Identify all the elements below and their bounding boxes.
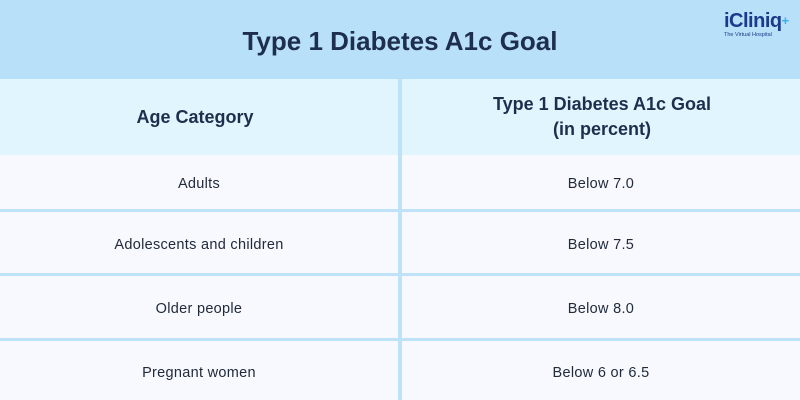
row: older: [156, 301, 634, 317]
row: pregnant: [142, 364, 649, 380]
header band: [0, 0, 800, 79]
header: age category: Age Category: [136, 106, 254, 126]
row: adolescents: Adolescents and children: [114, 236, 284, 252]
header: goal: Type 1 Diabetes A1c Goal: [493, 94, 711, 114]
row: adolescents: Below 7.5: [568, 236, 634, 252]
row: older: Older people: [156, 301, 242, 317]
row: adults: Below 7.0: [568, 176, 634, 192]
row: adolescents: [114, 236, 634, 252]
header: goal: (in percent): [553, 119, 651, 139]
header: goal: [493, 94, 711, 139]
row: pregnant: Below 6 or 6.5: [553, 364, 649, 380]
row: adults: [178, 176, 634, 192]
title: Type 1 Diabetes A1c Goal: [242, 26, 558, 56]
row: older: Below 8.0: [568, 301, 634, 317]
column header row: [0, 79, 800, 155]
row: adults: Adults: [178, 176, 220, 192]
logo: The Virtual Hospital: [724, 32, 772, 38]
logo: iCliniq+: [724, 10, 789, 32]
row: pregnant: Pregnant women: [142, 364, 256, 380]
